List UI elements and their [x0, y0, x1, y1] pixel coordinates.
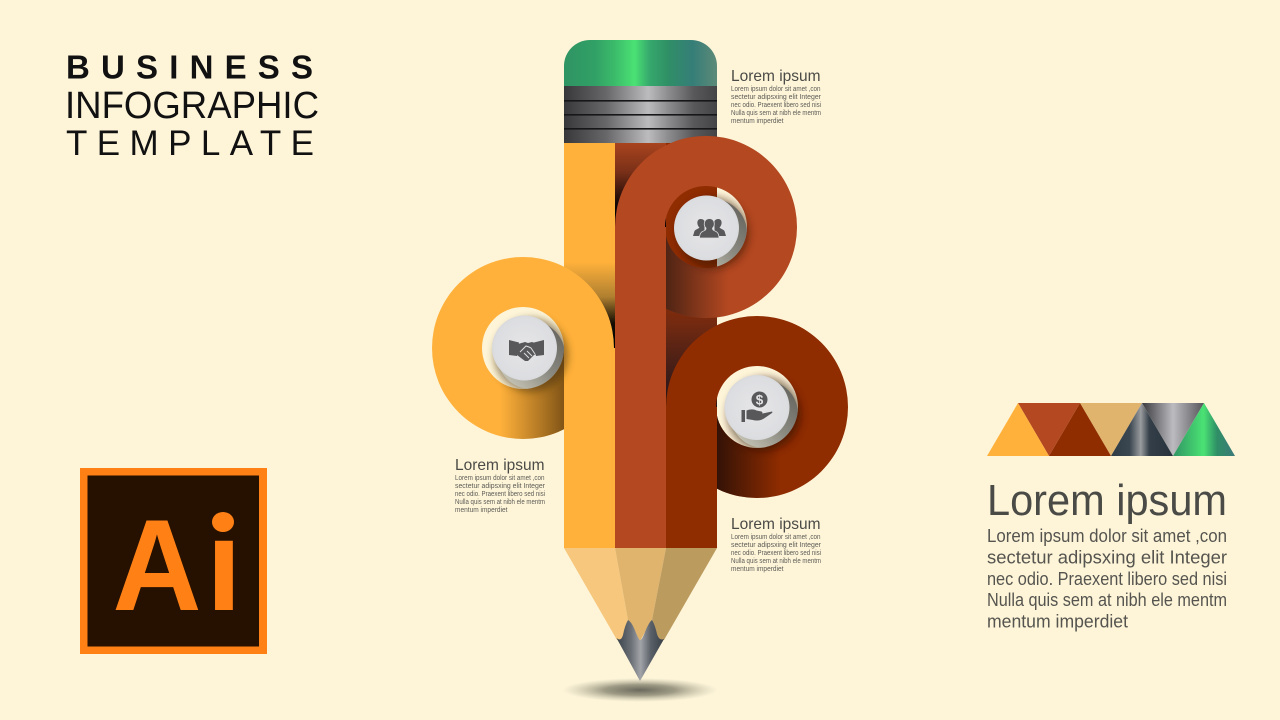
red disc crescent: [717, 201, 747, 266]
text block: main: [987, 476, 1227, 632]
title: INFOGRAPHIC: [65, 85, 319, 127]
pencil graphite: [616, 620, 664, 681]
title: TEMPLATE: [66, 124, 314, 163]
column: red upper: [615, 143, 666, 227]
title: [65, 48, 319, 163]
pencil eraser: [564, 40, 717, 86]
red disc shadow: [677, 197, 749, 269]
text block: main: nec odio. Praexent libero sed nisi: [987, 569, 1227, 589]
pencil shadow: [562, 678, 718, 702]
dark red disc shadow: [727, 377, 801, 451]
triangle colour strip: [987, 403, 1235, 456]
text block: bottom right: [731, 516, 822, 573]
text block: main: sectetur adipsxing elit Integer: [987, 548, 1227, 568]
text block: bottom right: Nulla quis sem at nibh ele mentm: [731, 558, 821, 565]
orange disc shadow: [494, 318, 568, 392]
text block: left: nec odio. Praexent libero sed nisi: [455, 491, 545, 498]
dark red disc crescent: [734, 384, 798, 448]
text block: top right: sectetur adipsxing elit Integer: [731, 94, 822, 101]
text block: bottom right: mentum imperdiet: [731, 566, 784, 573]
text block: top right: Lorem ipsum dolor sit amet ,con: [731, 86, 821, 93]
text block: top right: [731, 68, 822, 125]
icon: hand with dollar coin: $: [756, 392, 764, 407]
icon: Adobe Illustrator logo: A: [112, 492, 202, 638]
icon: handshake: [509, 340, 544, 361]
text block: bottom right: nec odio. Praexent libero sed nisi: [731, 550, 821, 557]
orange disc crescent: [500, 326, 564, 389]
icon: Adobe Illustrator logo: [80, 468, 267, 654]
text block: main: mentum imperdiet: [987, 612, 1128, 632]
badge: people: [674, 196, 749, 269]
text block: left: [455, 457, 546, 514]
text block: left: Lorem ipsum: [455, 457, 544, 474]
text block: main: Lorem ipsum: [987, 476, 1227, 525]
text block: main: Lorem ipsum dolor sit amet ,con: [987, 526, 1227, 546]
text block: left: mentum imperdiet: [455, 507, 508, 514]
text block: top right: mentum imperdiet: [731, 118, 784, 125]
icon: people: [693, 218, 726, 238]
column: orange front: [564, 348, 615, 548]
text block: left: sectetur adipsxing elit Integer: [455, 483, 546, 490]
text block: top right: Lorem ipsum: [731, 68, 820, 85]
orange ring: [432, 257, 614, 439]
red ring: [615, 136, 797, 318]
column: orange upper: [564, 143, 615, 348]
icon: Adobe Illustrator logo: i: [206, 491, 242, 638]
text block: bottom right: Lorem ipsum dolor sit amet ,con: [731, 534, 821, 541]
text block: main: Nulla quis sem at nibh ele mentm: [987, 590, 1227, 610]
column: dark red front: [666, 407, 717, 548]
pencil ferrule: [564, 86, 717, 143]
dark red ring: [666, 316, 848, 498]
text block: left: Nulla quis sem at nibh ele mentm: [455, 499, 545, 506]
text block: bottom right: sectetur adipsxing elit Integer: [731, 542, 822, 549]
text block: top right: nec odio. Praexent libero sed nisi: [731, 102, 821, 109]
column: dark red upper: [666, 143, 717, 407]
orange disc: [492, 316, 557, 380]
column: red front: [615, 227, 666, 548]
text block: top right: Nulla quis sem at nibh ele mentm: [731, 110, 821, 117]
red disc: [674, 196, 739, 260]
text block: left: Lorem ipsum dolor sit amet ,con: [455, 475, 545, 482]
badge: money: [724, 375, 801, 451]
pencil tip: [564, 548, 717, 681]
dark red disc: [724, 375, 790, 440]
text block: bottom right: Lorem ipsum: [731, 516, 820, 533]
pencil: [564, 40, 717, 681]
title: BUSINESS: [66, 48, 313, 86]
badge: handshake: [492, 316, 568, 392]
